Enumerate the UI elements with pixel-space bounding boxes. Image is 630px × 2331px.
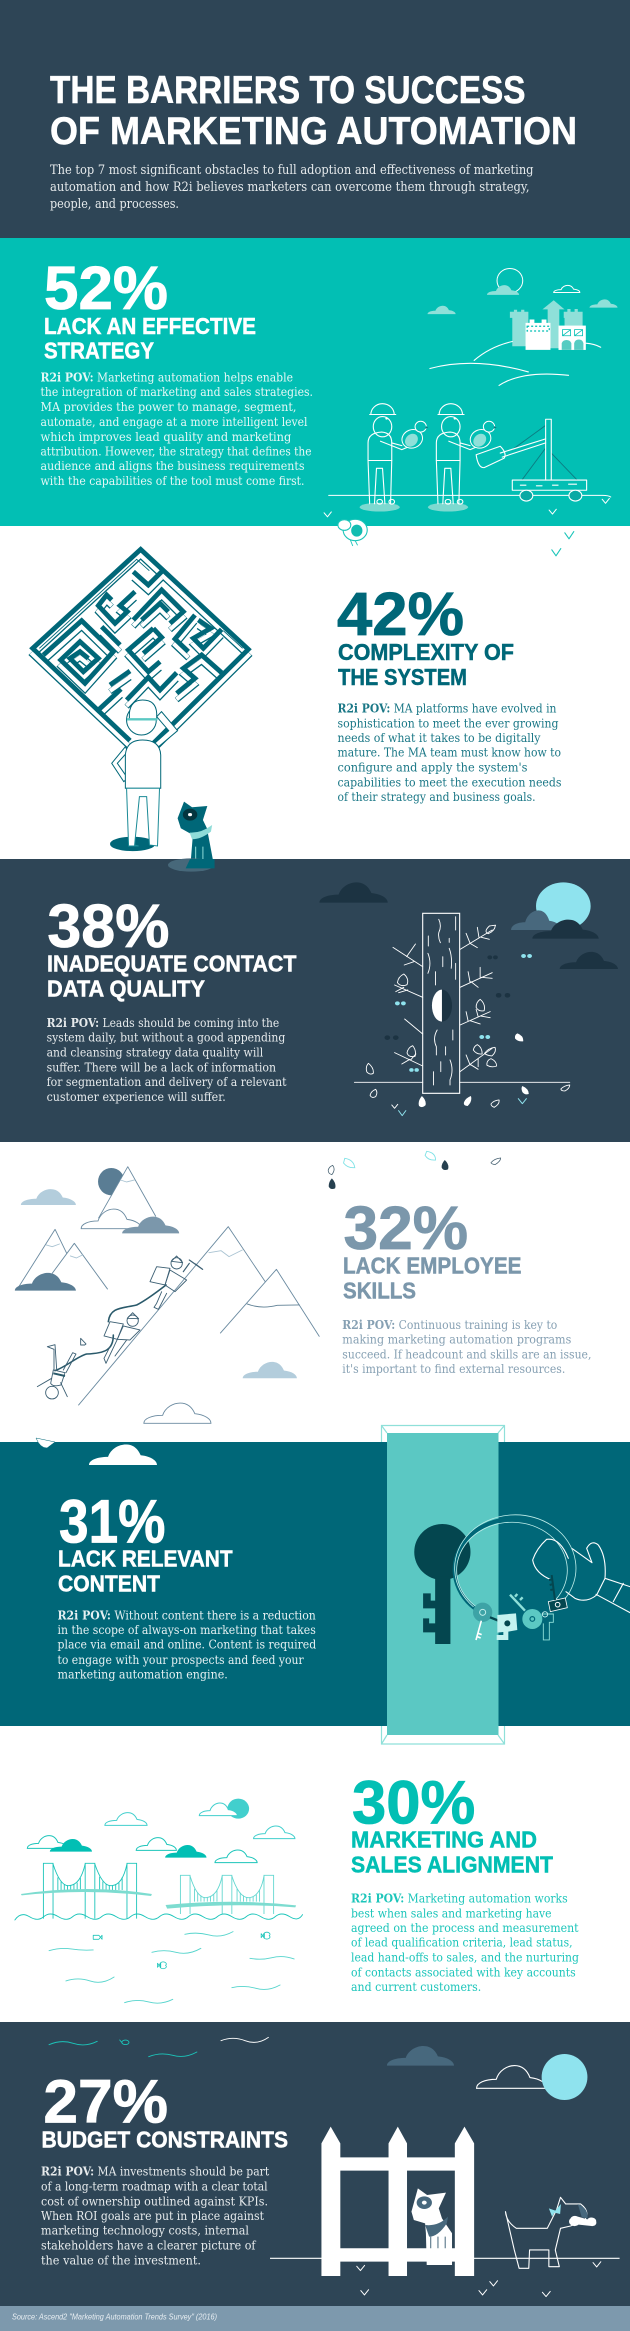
illustration: maze	[33, 549, 248, 750]
bark and branches	[354, 917, 570, 1108]
body text: customer experience will suffer.	[47, 1090, 226, 1104]
knothole	[432, 990, 442, 1022]
climber falling	[37, 1338, 86, 1399]
body text: it's important to find external resources.	[342, 1362, 565, 1376]
icon: fence	[321, 2127, 474, 2276]
ground line	[270, 2257, 620, 2259]
body text: and cleansing strategy data quality will	[47, 1046, 263, 1060]
body text: needs of what it takes to be digitally	[338, 731, 541, 745]
rope	[55, 1285, 166, 1371]
source note: Source: Ascend2 "Marketing Automation Trends Survey" (2016)	[12, 2312, 217, 2322]
body text: of contacts associated with key accounts	[351, 1965, 576, 1979]
intro text: people, and processes.	[50, 197, 179, 212]
panel: header	[0, 0, 630, 238]
body text: place via email and online. Content is required	[58, 1638, 316, 1652]
grass ticks	[324, 498, 609, 517]
panel: 52% lack an effective strategy	[0, 238, 630, 526]
body text: succeed. If headcount and skills are an issue,	[342, 1347, 591, 1361]
worker one	[360, 404, 428, 512]
illustration: key ring held by a hand	[455, 1515, 630, 1640]
body text: capabilities to meet the execution needs	[338, 775, 562, 789]
door bottom	[382, 1726, 504, 1744]
heading	[338, 639, 514, 690]
body text: of a long-term roadmap with a clear total	[41, 2179, 268, 2193]
illustration: tree trunk, moon and clouds	[319, 882, 618, 1116]
body text	[338, 702, 562, 804]
body text: with the capabilities of the tool must come first.	[40, 474, 304, 488]
moon and clouds	[387, 2046, 587, 2100]
body text	[47, 1016, 287, 1104]
heading: CONTENT	[58, 1571, 161, 1597]
fish	[93, 1932, 270, 1969]
stat: 32%: 32%	[344, 1194, 468, 1262]
heading: COMPLEXITY OF	[338, 639, 514, 665]
trunk	[423, 913, 460, 1093]
body text: R2i POV: Leads should be coming into the	[47, 1016, 279, 1030]
sun and clouds	[27, 1799, 295, 1863]
heading: STRATEGY	[44, 338, 154, 364]
panel: 32% lack employee skills	[0, 1142, 630, 1442]
body text: agreed on the process and measurement	[351, 1921, 579, 1935]
body text: attribution. However, the strategy that defines the	[40, 444, 312, 458]
body text: the value of the investment.	[41, 2253, 201, 2267]
body text: R2i POV: Continuous training is key to	[342, 1318, 557, 1332]
icon: white cloud	[89, 1444, 157, 1465]
body text: audience and aligns the business requirements	[40, 459, 304, 473]
heading: LACK AN EFFECTIVE	[44, 313, 256, 339]
body text: R2i POV: Without content there is a reduction	[58, 1608, 316, 1622]
heading	[44, 313, 256, 364]
heading	[47, 951, 297, 1002]
heading: DATA QUALITY	[47, 976, 205, 1002]
climber top	[150, 1256, 203, 1309]
body text: lead hand-offs to sales, and the nurturing	[351, 1951, 579, 1965]
body text: which improves lead quality and marketing	[40, 430, 292, 444]
eyes in the dark	[385, 954, 532, 1072]
icon: bird	[398, 421, 428, 451]
icon: dog behind fence	[411, 2188, 452, 2265]
illustration: castle on a hill with workers and catapult	[324, 268, 618, 517]
heading: INADEQUATE CONTACT	[47, 951, 297, 977]
body text: to engage with your prospects and feed your	[58, 1653, 304, 1667]
body text: R2i POV: Marketing automation works	[351, 1892, 568, 1906]
body text	[351, 1892, 579, 1994]
body text: in the scope of always-on marketing that takes	[58, 1623, 316, 1637]
body text: making marketing automation programs	[342, 1333, 571, 1347]
icon: door	[387, 1433, 498, 1735]
body text	[58, 1608, 316, 1682]
icon: keyhole	[414, 1524, 471, 1644]
panel: 30% marketing and sales alignment	[0, 1726, 630, 2022]
waves and fish	[49, 2037, 268, 2057]
body text: marketing automation engine.	[58, 1668, 228, 1682]
body text: mature. The MA team must know how to	[338, 746, 561, 760]
heading	[351, 1827, 554, 1878]
hand	[533, 1539, 630, 1613]
stat: 52%: 52%	[44, 254, 168, 322]
water waves	[15, 1914, 303, 2003]
panel: 31% lack relevant content	[0, 1433, 630, 1735]
footer: source bar	[0, 2306, 630, 2331]
illustration: fence and dogs	[49, 2037, 620, 2297]
stat: 27%: 27%	[43, 2068, 168, 2136]
icon: bird	[467, 421, 497, 451]
heading: SALES ALIGNMENT	[351, 1852, 554, 1878]
body text: and current customers.	[351, 1980, 481, 1994]
illustration: man with hat looking at maze	[110, 700, 178, 851]
intro text: automation and how R2i believes marketers can overcome them through strategy,	[50, 180, 530, 195]
grass ticks	[552, 532, 574, 556]
bridge right	[166, 1875, 296, 1914]
stat: 30%: 30%	[352, 1768, 475, 1836]
body text: of their strategy and business goals.	[338, 790, 536, 804]
stat: 31%: 31%	[59, 1487, 166, 1555]
bridge left	[21, 1863, 152, 1919]
heading: SKILLS	[343, 1277, 416, 1303]
body text	[41, 2165, 269, 2267]
body text: of lead qualification criteria, lead status,	[351, 1936, 572, 1950]
heading	[58, 1546, 233, 1597]
keys	[473, 1575, 567, 1640]
body text: for segmentation and delivery of a relevant	[47, 1075, 287, 1089]
title	[50, 69, 577, 153]
body text: sophistication to meet the ever growing	[338, 716, 559, 730]
body text: When ROI goals are put in place against	[41, 2209, 264, 2223]
icon: sun and clouds	[428, 268, 618, 314]
door frame top	[382, 1426, 504, 1442]
grass ticks	[399, 1099, 526, 1116]
heading: MARKETING AND	[351, 1827, 537, 1853]
illustration: climbers on a rope	[37, 1256, 203, 1399]
illustration: bridges over water	[15, 1799, 303, 2003]
icon: moon	[98, 1168, 125, 1195]
body text: R2i POV: MA investments should be part	[41, 2165, 269, 2179]
body text: the integration of marketing and sales strategies.	[40, 385, 313, 399]
body text: suffer. There will be a lack of information	[47, 1060, 276, 1074]
icon: castle	[510, 300, 586, 350]
body text: marketing technology costs, internal	[41, 2224, 249, 2238]
icon: bird on border	[338, 519, 367, 546]
mountains	[19, 1167, 319, 1405]
intro text: The top 7 most significant obstacles to full adoption and effectiveness of marketing	[50, 163, 534, 178]
body text: system daily, but without a good appending	[47, 1031, 286, 1045]
worker two	[428, 404, 497, 512]
ring	[455, 1519, 571, 1608]
icon: walking dog with bone	[505, 2197, 596, 2268]
dog paws and shadow	[168, 858, 215, 872]
body text: stakeholders have a clearer picture of	[41, 2239, 257, 2253]
body text: automate, and engage at a more intelligent level	[40, 415, 308, 429]
hills	[430, 341, 601, 385]
body text: MA provides the power to manage, segment,	[40, 400, 296, 414]
stat: 38%: 38%	[47, 892, 169, 960]
heading: THE SYSTEM	[338, 664, 467, 690]
snow lines	[46, 1180, 242, 1258]
grass ticks	[357, 2262, 601, 2297]
body text: cost of ownership outlined against KPIs.	[41, 2194, 268, 2208]
heading: LACK RELEVANT	[58, 1546, 233, 1572]
title: OF MARKETING AUTOMATION	[50, 110, 577, 153]
body text: configure and apply the system's	[338, 761, 528, 775]
panel: 38% inadequate contact data quality	[0, 858, 630, 1142]
body text: R2i POV: Marketing automation helps enable	[40, 370, 293, 384]
ground line	[329, 495, 611, 497]
illustration: mountains and clouds	[15, 1151, 501, 1423]
heading	[343, 1252, 522, 1303]
icon: moon and clouds	[319, 882, 618, 969]
falling leaves	[328, 1151, 501, 1189]
panel: 27% budget constraints	[0, 2022, 630, 2306]
body text: R2i POV: MA platforms have evolved in	[338, 702, 557, 716]
heading: BUDGET CONSTRAINTS	[42, 2127, 288, 2153]
stat: 42%: 42%	[337, 580, 464, 648]
clouds	[15, 1189, 297, 1423]
falling white leaves	[419, 1033, 529, 1107]
intro text	[50, 163, 534, 212]
icon: dog	[178, 802, 213, 860]
body text: best when sales and marketing have	[351, 1906, 552, 1920]
body text	[342, 1318, 591, 1376]
body text	[40, 370, 313, 488]
climber middle	[104, 1313, 140, 1363]
title: THE BARRIERS TO SUCCESS	[50, 69, 526, 112]
icon: falling pinecone	[36, 1438, 55, 1448]
panel: 42% complexity of the system	[0, 519, 630, 860]
heading: LACK EMPLOYEE	[343, 1252, 522, 1278]
icon: catapult	[476, 419, 587, 501]
